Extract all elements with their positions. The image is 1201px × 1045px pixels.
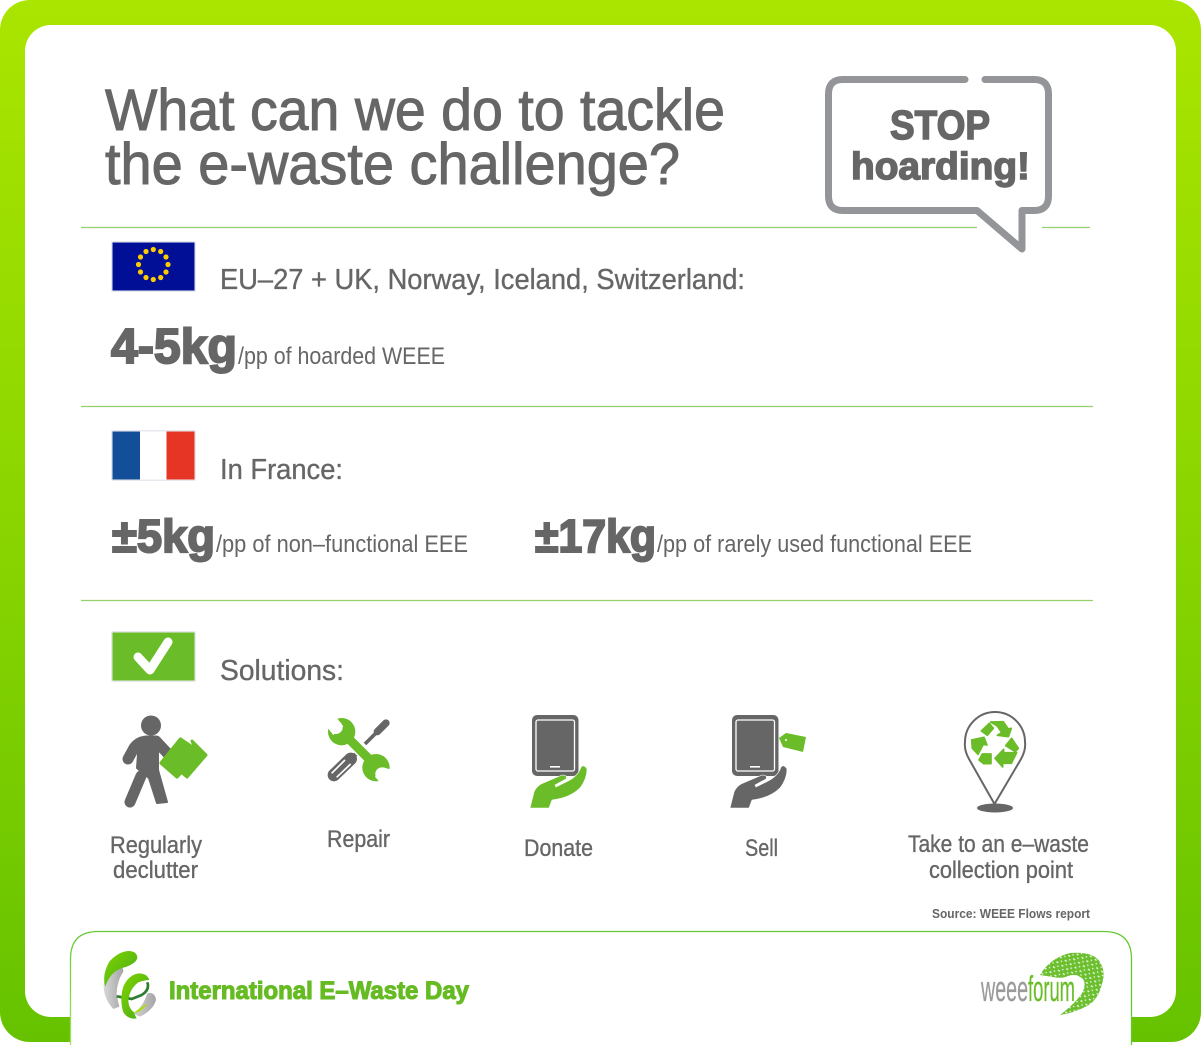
icon: repair tools [327, 717, 393, 783]
France statistic: non-functional [112, 510, 468, 562]
icon: person decluttering [128, 716, 206, 803]
title: What can we do to tackle [105, 78, 725, 143]
icon: donate tablet [530, 715, 587, 808]
label: Donate [524, 835, 593, 862]
France statistic: non-functional: /pp of non–functional EEE [216, 531, 468, 558]
EU statistic: 4-5kg [111, 320, 237, 374]
label: Regularly [110, 832, 202, 859]
icon: sell tablet with tag [730, 715, 806, 808]
footer panel [70, 932, 1132, 1045]
source note: Source: WEEE Flows report [932, 906, 1091, 921]
label: Sell [745, 835, 778, 862]
speech bubble: stop hoarding: hoarding! [851, 146, 1030, 188]
France heading: In France: [220, 454, 343, 486]
title [105, 78, 725, 197]
speech bubble: stop hoarding [828, 80, 1048, 249]
title: the e-waste challenge? [105, 132, 680, 197]
EU heading: EU–27 + UK, Norway, Iceland, Switzerland: [220, 264, 745, 296]
speech bubble: stop hoarding: STOP [890, 102, 990, 148]
France statistic: rarely used [535, 510, 972, 562]
icon: WEEE Forum logo: forum [1028, 968, 1075, 1009]
label [110, 832, 202, 884]
icon: WEEE Forum logo [980, 953, 1104, 1015]
icon: French flag [111, 430, 196, 481]
France statistic: non-functional: ±5kg [112, 510, 215, 562]
icon: EU flag [111, 241, 196, 292]
icon: WEEE Forum logo: weee [980, 968, 1028, 1009]
label: Take to an e–waste [908, 831, 1089, 858]
solutions heading: Solutions: [220, 655, 344, 687]
label: collection point [929, 857, 1073, 884]
EU statistic: /pp of hoarded WEEE [238, 343, 445, 370]
icon: check mark [111, 631, 196, 682]
icon: International E-Waste Day logo [104, 951, 156, 1019]
France statistic: rarely used: /pp of rarely used functional EEE [657, 531, 972, 558]
label [908, 831, 1089, 884]
icon: collection point pin [965, 712, 1025, 812]
EU statistic [111, 320, 445, 374]
footer title: International E–Waste Day [169, 977, 469, 1005]
France statistic: rarely used: ±17kg [535, 510, 656, 562]
label: Repair [327, 826, 390, 853]
label: declutter [113, 857, 198, 884]
